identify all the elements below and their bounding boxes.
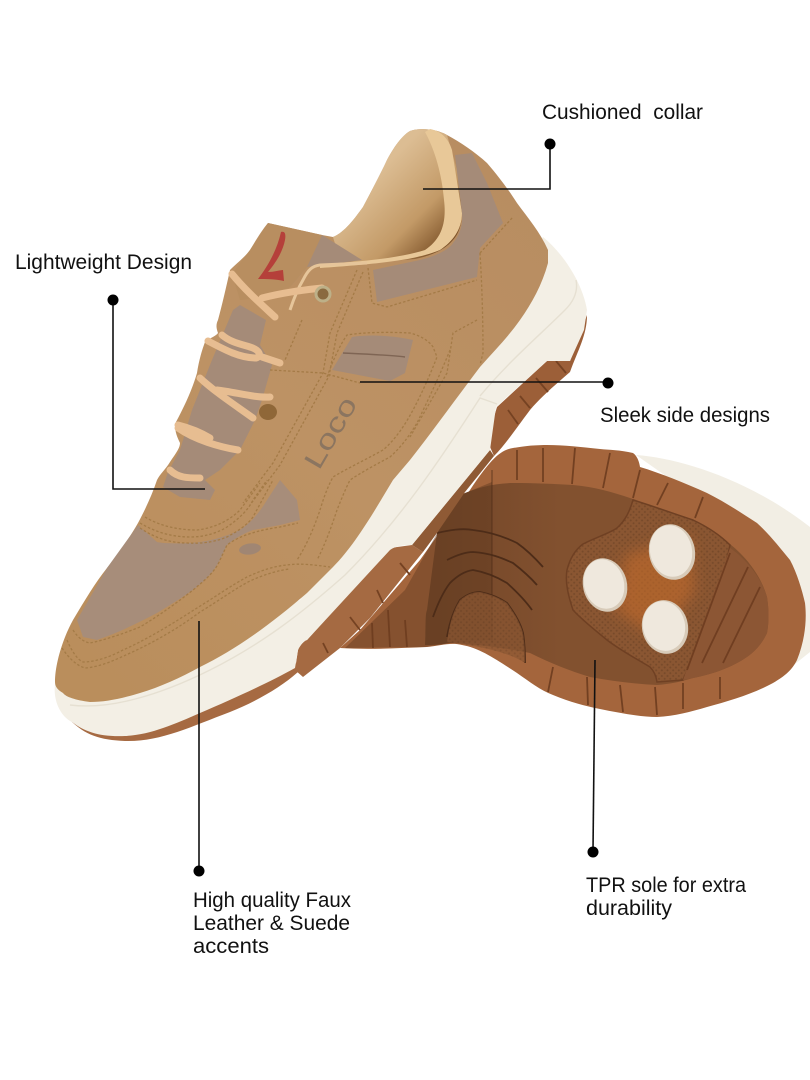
shoe showing the sole bbox=[340, 445, 810, 717]
callout: faux leather and suede: accents bbox=[193, 935, 269, 958]
callout: cushioned collar: Cushioned collar bbox=[542, 101, 703, 124]
main shoe side view bbox=[55, 129, 587, 741]
suede side window bbox=[332, 336, 413, 381]
callout: faux leather and suede: High quality Faux bbox=[193, 889, 351, 912]
white midsole bbox=[55, 237, 587, 736]
textured panel bbox=[566, 500, 730, 682]
embossed side logo: Loco bbox=[298, 391, 363, 474]
callout: sleek side designs bbox=[360, 378, 770, 427]
gum lug under the heel bbox=[487, 315, 587, 456]
gum under the toe bbox=[70, 660, 298, 741]
recessed inner sole area bbox=[425, 483, 768, 685]
gum strip behind the arch bbox=[412, 450, 494, 552]
callout: lightweight design bbox=[15, 251, 205, 489]
collar piping bbox=[290, 263, 367, 310]
striped toe panel bbox=[683, 548, 768, 680]
small oval vent bbox=[238, 542, 262, 556]
curved arch grooves bbox=[433, 470, 543, 663]
upper body bbox=[55, 129, 548, 702]
three round sole pods bbox=[577, 520, 700, 658]
suede lace strip bbox=[163, 305, 272, 500]
red logo on tongue bbox=[258, 232, 285, 281]
lower eyelet bbox=[259, 404, 277, 420]
textured arch patch bbox=[447, 592, 525, 663]
glow around pods bbox=[615, 535, 695, 640]
midsole ledge lines bbox=[70, 280, 577, 706]
white rim of the sole shoe bbox=[636, 455, 810, 672]
top eyelet bbox=[316, 287, 330, 301]
gum lug under the midfoot bbox=[295, 545, 423, 677]
callout: faux leather and suede bbox=[193, 621, 351, 958]
left dark under-arch area bbox=[345, 482, 492, 648]
suede tongue top bbox=[290, 235, 362, 287]
suede forefoot panel bbox=[77, 480, 300, 640]
callout: cushioned collar bbox=[423, 101, 703, 189]
callout: faux leather and suede: Leather & Suede bbox=[193, 912, 350, 935]
callout: TPR sole: durability bbox=[586, 897, 673, 920]
lug grooves bbox=[323, 361, 566, 653]
stitching bbox=[62, 217, 513, 668]
laces bbox=[170, 274, 322, 478]
padded collar lining bbox=[333, 129, 462, 263]
callout: TPR sole bbox=[586, 660, 746, 920]
suede heel panel bbox=[373, 153, 503, 302]
callout: sleek side designs: Sleek side designs bbox=[600, 404, 770, 427]
gum outsole bbox=[340, 445, 806, 717]
tread grooves bbox=[372, 448, 760, 715]
callout: TPR sole: TPR sole for extra bbox=[586, 874, 746, 897]
callout: lightweight design: Lightweight Design bbox=[15, 251, 192, 274]
collar rim bbox=[320, 129, 462, 268]
tan tongue with logo bbox=[232, 223, 322, 300]
